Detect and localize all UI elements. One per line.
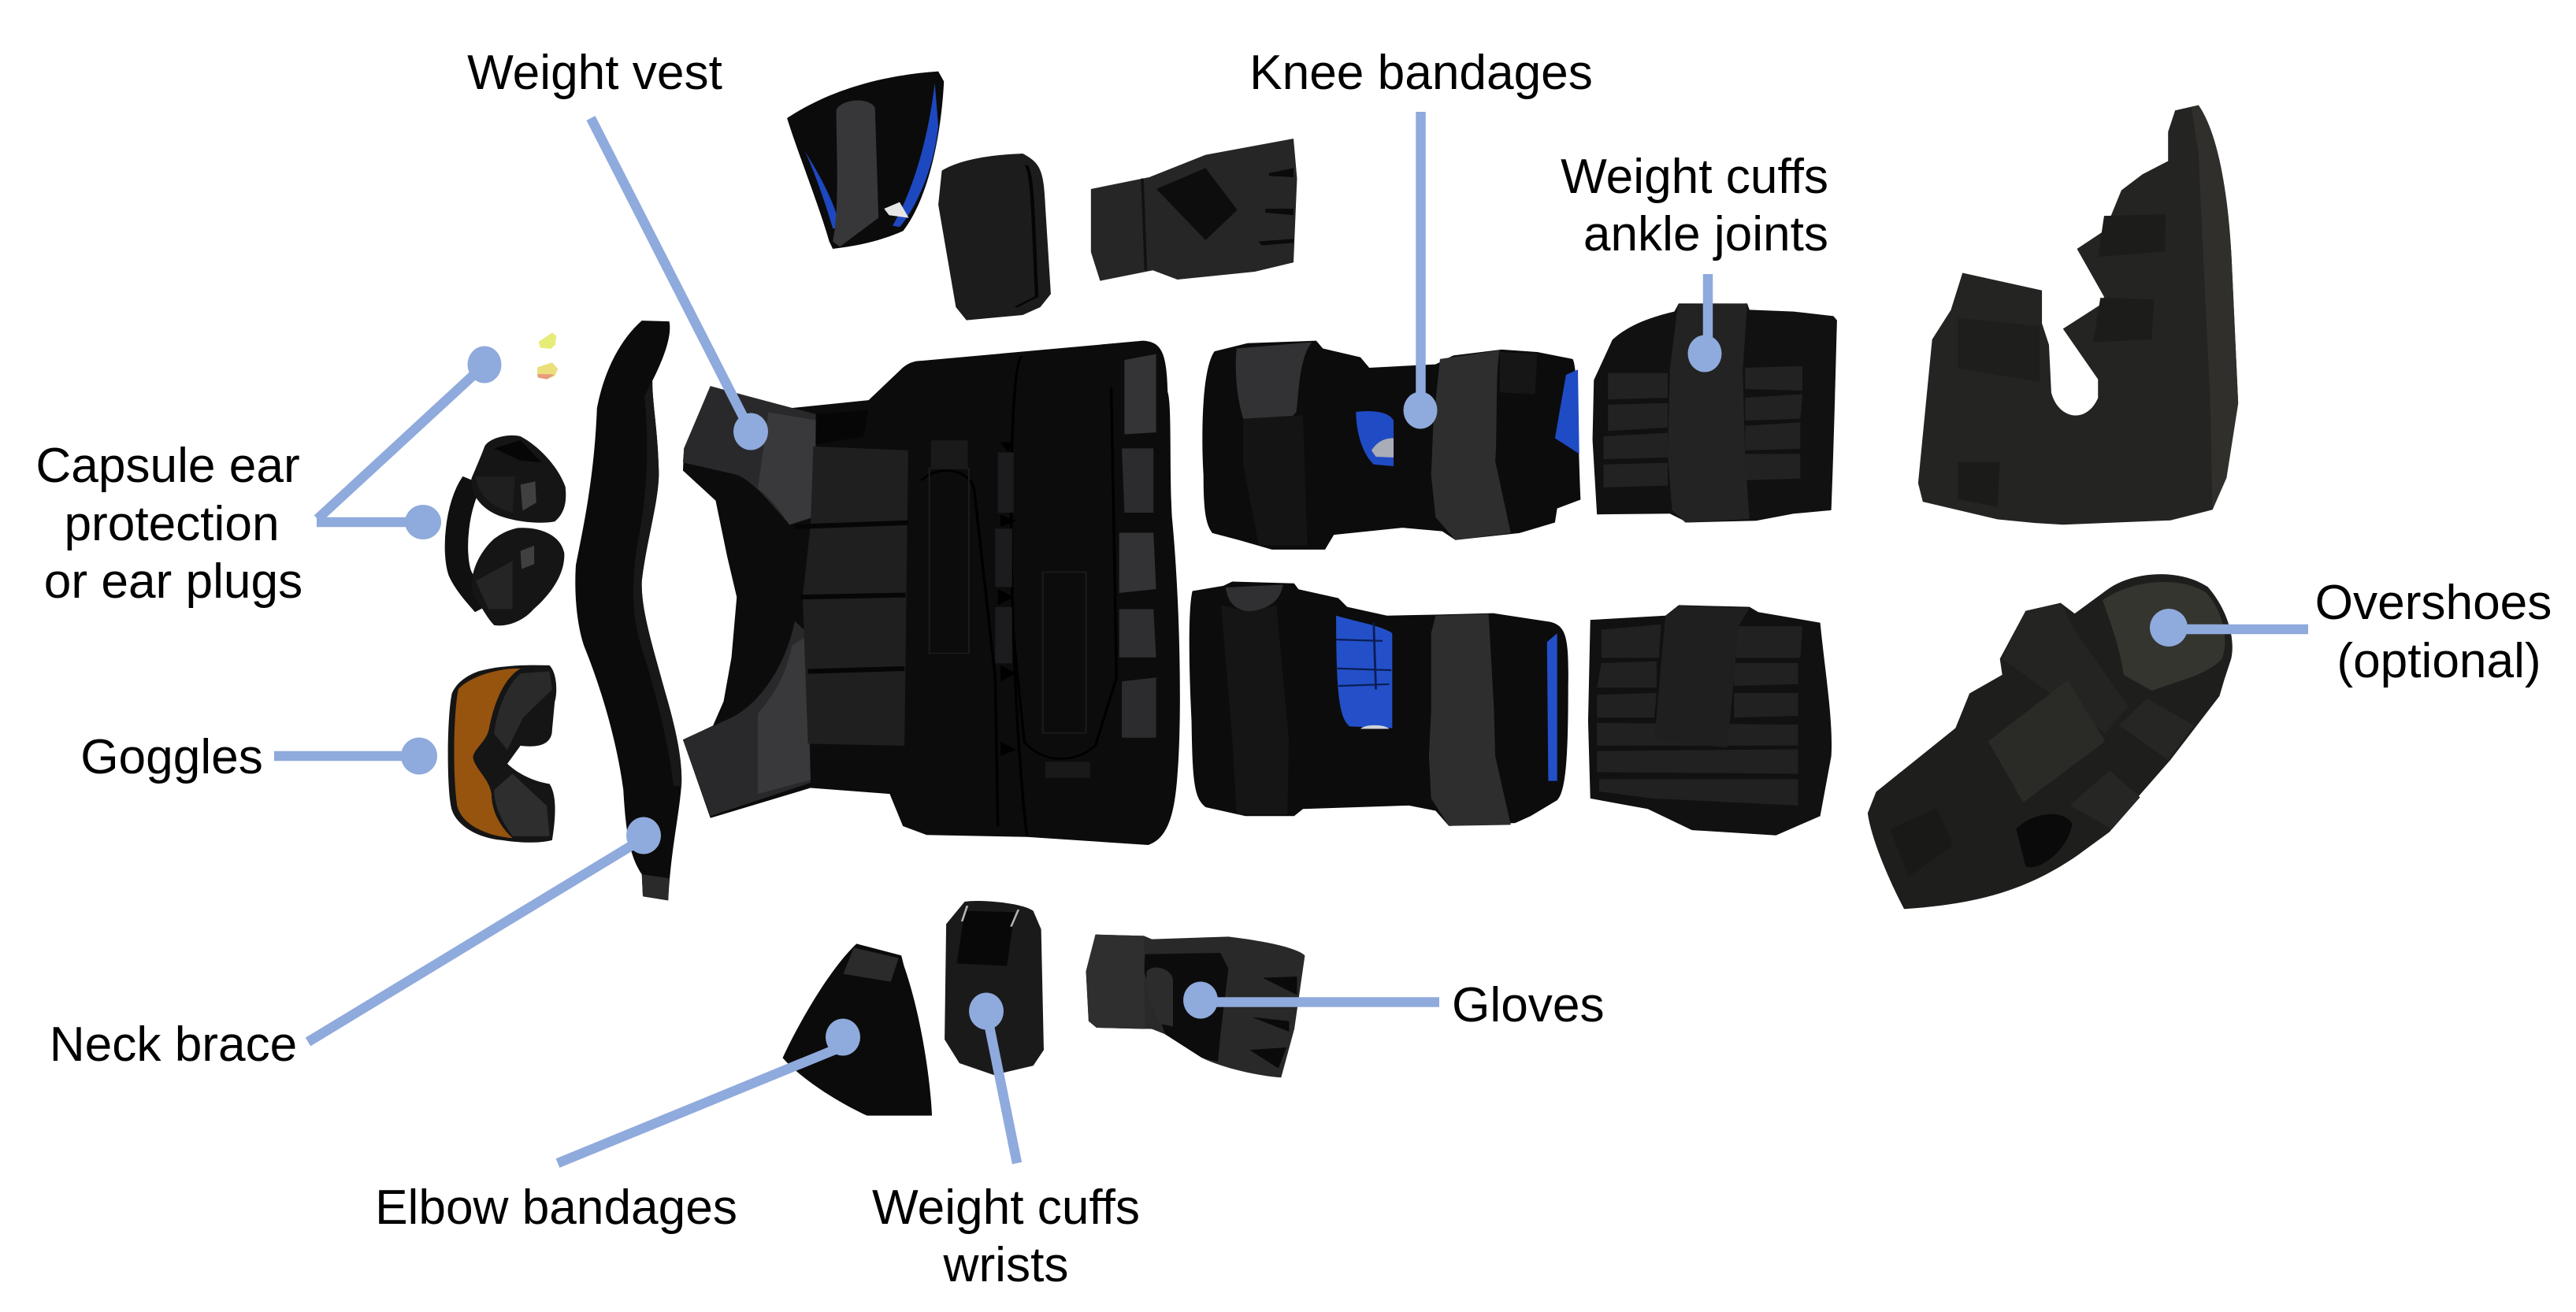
callout: weight vest: Weight vest <box>467 46 722 100</box>
knee bandage lower <box>1190 581 1568 826</box>
callout: gloves <box>1183 978 1605 1032</box>
callout: overshoes <box>2150 576 2552 688</box>
callout: goggles: Goggles <box>80 730 263 784</box>
weight cuff wrist top <box>938 154 1051 321</box>
callout: neck brace: Neck brace <box>50 1017 297 1072</box>
callout: capsule ear protection: or ear plugs <box>44 554 303 609</box>
callout: weight cuffs wrists <box>872 992 1140 1292</box>
callout: knee bandages <box>1249 46 1593 428</box>
overshoe upper <box>1918 106 2238 524</box>
callout: overshoes: (optional) <box>2337 634 2541 688</box>
weight vest <box>683 341 1180 845</box>
neck brace <box>575 321 681 900</box>
weight cuff ankle lower <box>1588 605 1832 836</box>
callout: weight cuffs wrists: Weight cuffs <box>872 1180 1140 1235</box>
callout: neck brace <box>50 817 661 1072</box>
elbow bandage bottom <box>783 943 932 1116</box>
callout: elbow bandages <box>375 1019 860 1235</box>
callout: weight cuffs ankle joints <box>1561 150 1828 372</box>
callout: weight cuffs ankle joints: Weight cuffs <box>1561 150 1828 204</box>
knee bandage upper <box>1202 341 1580 550</box>
elbow bandage top <box>787 72 944 249</box>
callout: overshoes: Overshoes <box>2315 576 2552 630</box>
callout: capsule ear protection: Capsule ear <box>35 439 300 493</box>
callout: capsule ear protection: protection <box>64 497 280 551</box>
weight cuff wrist bottom <box>945 901 1044 1075</box>
callout: gloves: Gloves <box>1452 978 1605 1032</box>
glove bottom <box>1086 935 1305 1077</box>
weight cuff ankle upper <box>1593 303 1837 522</box>
callout: weight cuffs ankle joints: ankle joints <box>1583 207 1828 261</box>
ear muffs <box>456 435 566 625</box>
callout: capsule ear protection <box>35 347 501 609</box>
callout: weight cuffs wrists: wrists <box>943 1238 1068 1292</box>
overshoe lower <box>1868 574 2233 909</box>
callout: weight vest <box>467 46 768 450</box>
callout: elbow bandages: Elbow bandages <box>375 1180 737 1235</box>
callout: knee bandages: Knee bandages <box>1249 46 1593 100</box>
callout: goggles <box>80 730 437 784</box>
glove top <box>1091 139 1297 281</box>
ear plugs <box>537 332 558 380</box>
goggles <box>448 665 556 843</box>
